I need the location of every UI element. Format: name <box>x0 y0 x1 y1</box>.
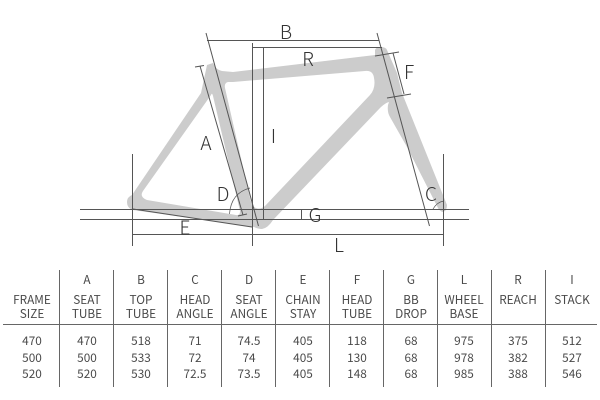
table header labels: HEAD <box>342 291 372 308</box>
table header labels: STACK <box>554 291 590 308</box>
dimension lines <box>80 33 469 246</box>
table row 470: 405 <box>293 332 313 349</box>
table row 470: 512 <box>562 332 582 349</box>
dimension letters: B <box>280 18 292 45</box>
table column letters: G <box>407 271 415 288</box>
table header labels: TUBE <box>72 305 102 322</box>
table row 500: 68 <box>404 349 418 366</box>
table row 520: 388 <box>508 365 528 382</box>
table row 500: 527 <box>562 349 582 366</box>
table column letters: R <box>514 271 522 288</box>
table row 500 <box>22 349 582 366</box>
dimension letters: F <box>404 58 414 85</box>
table row 520 <box>22 365 582 382</box>
table row 520: 520 <box>22 365 42 382</box>
dimension letters: D <box>217 180 229 207</box>
table row 520: 73.5 <box>238 365 260 382</box>
table row 520: 546 <box>562 365 582 382</box>
table row 500: 74 <box>242 349 256 366</box>
table row 470: 518 <box>131 332 151 349</box>
table row 520: 530 <box>131 365 151 382</box>
table column letters: I <box>570 271 574 288</box>
table row 500: 978 <box>454 349 474 366</box>
table header labels: REACH <box>499 291 537 308</box>
table header labels: SIZE <box>20 305 44 322</box>
table header labels: FRAME <box>13 291 51 308</box>
table row 500: 405 <box>293 349 313 366</box>
table row 470: 470 <box>77 332 97 349</box>
dimension letters: A <box>200 129 212 156</box>
table header labels: TUBE <box>342 305 372 322</box>
table row 520: 68 <box>404 365 418 382</box>
table row 470 <box>22 332 582 349</box>
table header labels: TOP <box>130 291 152 308</box>
table column letters: E <box>300 271 307 288</box>
table row 500: 500 <box>22 349 42 366</box>
table column letters: B <box>137 271 145 288</box>
table header labels: HEAD <box>180 291 210 308</box>
table header labels <box>13 291 590 322</box>
dimension letters: E <box>180 214 190 240</box>
table grid <box>3 270 597 387</box>
table row 500: 500 <box>77 349 97 366</box>
table row 470: 71 <box>188 332 202 349</box>
table row 520: 148 <box>347 365 367 382</box>
table header labels: DROP <box>395 305 427 322</box>
dimension letters: C <box>425 180 437 207</box>
table column letters: L <box>461 271 468 288</box>
table header labels: CHAIN <box>285 291 321 308</box>
table header labels: WHEEL <box>444 291 484 308</box>
table row 470: 375 <box>508 332 528 349</box>
table row 470: 470 <box>22 332 42 349</box>
table row 520: 520 <box>77 365 97 382</box>
dimension letters: G <box>309 201 321 228</box>
table row 500: 72 <box>188 349 202 366</box>
table header labels: ANGLE <box>176 305 214 322</box>
table header labels: TUBE <box>126 305 156 322</box>
table row 470: 74.5 <box>238 332 260 349</box>
table row 470: 118 <box>347 332 367 349</box>
table column letters: A <box>83 271 91 288</box>
table header labels: BASE <box>450 305 479 322</box>
table column letters: C <box>191 271 199 288</box>
table row 500: 130 <box>347 349 367 366</box>
table row 520: 985 <box>454 365 474 382</box>
table row 520: 72.5 <box>184 365 206 382</box>
dimension letters <box>180 18 437 258</box>
table column letters: F <box>354 271 361 288</box>
table header labels: SEAT <box>73 291 101 308</box>
table row 500: 382 <box>508 349 528 366</box>
dimension letters: I <box>271 122 276 149</box>
table row 520: 405 <box>293 365 313 382</box>
bike frame silhouette <box>127 47 447 229</box>
table header labels: BB <box>403 291 419 308</box>
table row 500: 533 <box>131 349 151 366</box>
dimension letters: R <box>302 45 314 72</box>
geometry table <box>3 270 597 387</box>
table column letters <box>83 271 574 288</box>
table row 470: 975 <box>454 332 474 349</box>
table header labels: ANGLE <box>230 305 268 322</box>
table header labels: STAY <box>290 305 317 322</box>
table row 470: 68 <box>404 332 418 349</box>
table column letters: D <box>245 271 253 288</box>
dimension letters: L <box>334 231 344 258</box>
table header labels: SEAT <box>235 291 263 308</box>
